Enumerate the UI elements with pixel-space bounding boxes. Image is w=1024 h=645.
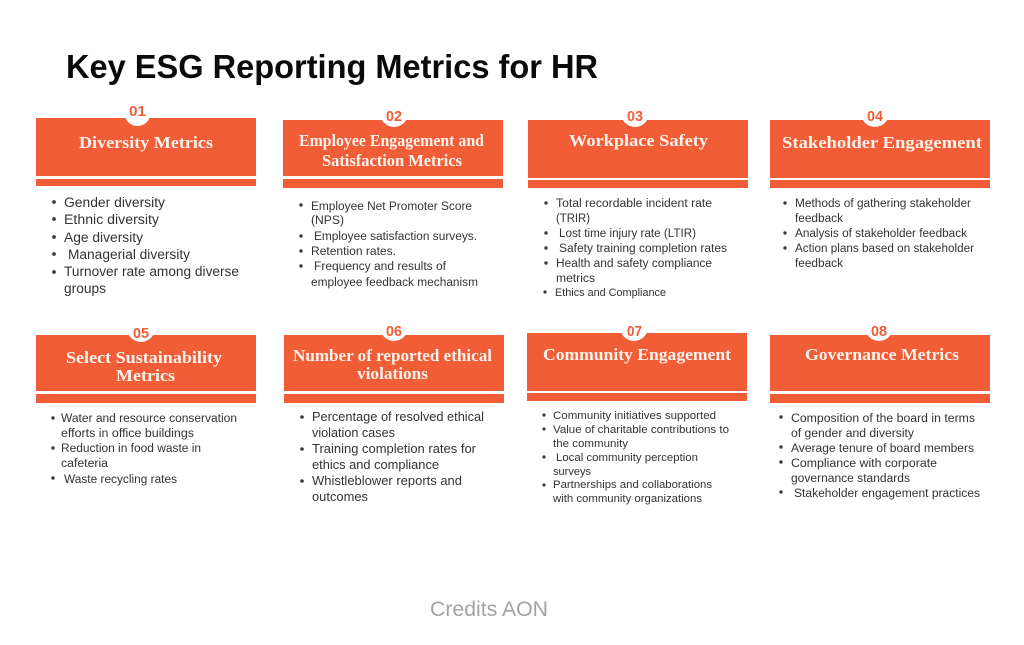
panel: 04 stakeholder engagement — [770, 99, 990, 270]
list: community engagement: Value of charitable contributions to — [553, 424, 729, 436]
heading: stakeholder engagement: Stakeholder Engagement — [782, 133, 982, 152]
list: employee engagement: Retention rates. — [311, 246, 396, 258]
list: employee engagement: Employee Net Promoter Score — [311, 201, 472, 213]
list: workplace safety: Ethics and Compliance — [555, 287, 666, 299]
list: employee engagement: Frequency and results of — [314, 261, 447, 273]
list: workplace safety: metrics — [556, 273, 595, 285]
list: stakeholder engagement — [783, 198, 974, 270]
credits: Credits AON — [430, 598, 548, 621]
panel: 02 employee engagement — [283, 99, 503, 289]
list: workplace safety: Safety training completion rates — [559, 243, 727, 255]
list: diversity metrics: Age diversity — [64, 230, 143, 245]
list: governance metrics: Compliance with corporate — [791, 458, 937, 470]
heading: community engagement: Community Engagement — [543, 345, 731, 364]
number 06: 06 — [386, 324, 402, 340]
list: ethical violations: outcomes — [312, 490, 368, 504]
list: stakeholder engagement: Analysis of stakeholder feedback — [795, 228, 967, 240]
list: community engagement — [542, 410, 729, 505]
list: governance metrics: Composition of the board in terms — [791, 413, 975, 425]
number 03: 03 — [627, 109, 643, 125]
heading: employee engagement: Employee Engagement and — [299, 131, 485, 150]
heading: select sustainability: Select Sustainability — [66, 348, 223, 367]
list: governance metrics — [779, 413, 980, 500]
number 07: 07 — [627, 324, 642, 340]
list: community engagement: surveys — [553, 466, 592, 478]
number 04: 04 — [867, 109, 883, 125]
list: ethical violations: Whistleblower reports and — [312, 474, 462, 488]
list: community engagement: with community organizations — [552, 493, 703, 505]
list: ethical violations: Training completion rates for — [312, 442, 476, 456]
number 01: 01 — [129, 104, 146, 120]
heading: reported ethical violations: Number of reported ethical — [293, 346, 492, 365]
list: stakeholder engagement: Action plans based on stakeholder — [795, 243, 974, 255]
list: ethical violations — [300, 410, 484, 504]
list: governance metrics: governance standards — [791, 473, 910, 485]
panel: 05 sustainability metrics — [36, 314, 256, 486]
list: diversity metrics: Turnover rate among diverse — [64, 264, 239, 279]
list: stakeholder engagement: feedback — [795, 213, 843, 225]
list: stakeholder engagement: feedback — [795, 258, 843, 270]
list: diversity metrics: Managerial diversity — [68, 247, 190, 262]
list: sustainability metrics — [51, 413, 237, 486]
list: diversity metrics: Gender diversity — [64, 195, 165, 210]
list: employee engagement — [299, 201, 478, 289]
panel: 08 governance metrics — [770, 313, 990, 500]
list: stakeholder engagement: Methods of gathering stakeholder — [795, 198, 971, 210]
title: Key ESG Reporting Metrics for HR — [66, 48, 598, 85]
list: sustainability metrics: Waste recycling rates — [64, 474, 177, 486]
panel: 07 community engagement — [527, 313, 747, 505]
list: employee engagement: Employee satisfaction surveys. — [314, 231, 477, 243]
list: sustainability metrics: Water and resource conservation — [61, 413, 237, 425]
list: ethical violations: violation cases — [312, 426, 395, 440]
list: community engagement: the community — [553, 438, 629, 450]
list: workplace safety: Lost time injury rate (LTIR) — [559, 228, 696, 240]
heading: workplace safety: Workplace Safety — [569, 131, 709, 150]
list: community engagement: Local community perception — [556, 452, 698, 464]
list: governance metrics: Stakeholder engagement practices — [794, 488, 980, 500]
heading line two: Satisfaction Metrics — [322, 151, 462, 170]
panel: 03 workplace safety — [528, 99, 748, 299]
panel: 01 diversity metrics — [36, 100, 256, 296]
list: ethical violations: ethics and compliance — [312, 458, 439, 472]
list: workplace safety: (TRIR) — [556, 213, 590, 225]
list: sustainability metrics: cafeteria — [61, 458, 109, 470]
list: diversity metrics: groups — [64, 281, 106, 296]
list: workplace safety: Total recordable incident rate — [556, 198, 712, 210]
number 02: 02 — [386, 109, 402, 125]
list: employee engagement: (NPS) — [311, 215, 344, 227]
number 08: 08 — [871, 324, 887, 340]
heading: diversity metrics: Diversity Metrics — [79, 133, 213, 152]
list: governance metrics: Average tenure of board members — [791, 443, 974, 455]
panel: 06 ethical violations — [284, 313, 504, 504]
list: governance metrics: of gender and diversity — [791, 428, 914, 440]
list: community engagement: Community initiatives supported — [553, 410, 716, 422]
list: workplace safety — [543, 198, 727, 299]
heading line two: Metrics — [116, 366, 175, 385]
list: sustainability metrics: Reduction in food waste in — [61, 443, 201, 455]
list: sustainability metrics: efforts in office buildings — [61, 428, 194, 440]
list: diversity metrics: Ethnic diversity — [64, 212, 159, 227]
heading line two: violations — [357, 364, 428, 383]
number 05: 05 — [133, 326, 149, 342]
heading: governance metrics: Governance Metrics — [805, 345, 959, 364]
list: community engagement: Partnerships and collaborations — [553, 479, 713, 491]
list: employee engagement: employee feedback mechanism — [311, 277, 478, 289]
list: workplace safety: Health and safety compliance — [556, 258, 712, 270]
list: ethical violations: Percentage of resolved ethical — [312, 410, 484, 424]
list: diversity metrics — [52, 195, 239, 296]
